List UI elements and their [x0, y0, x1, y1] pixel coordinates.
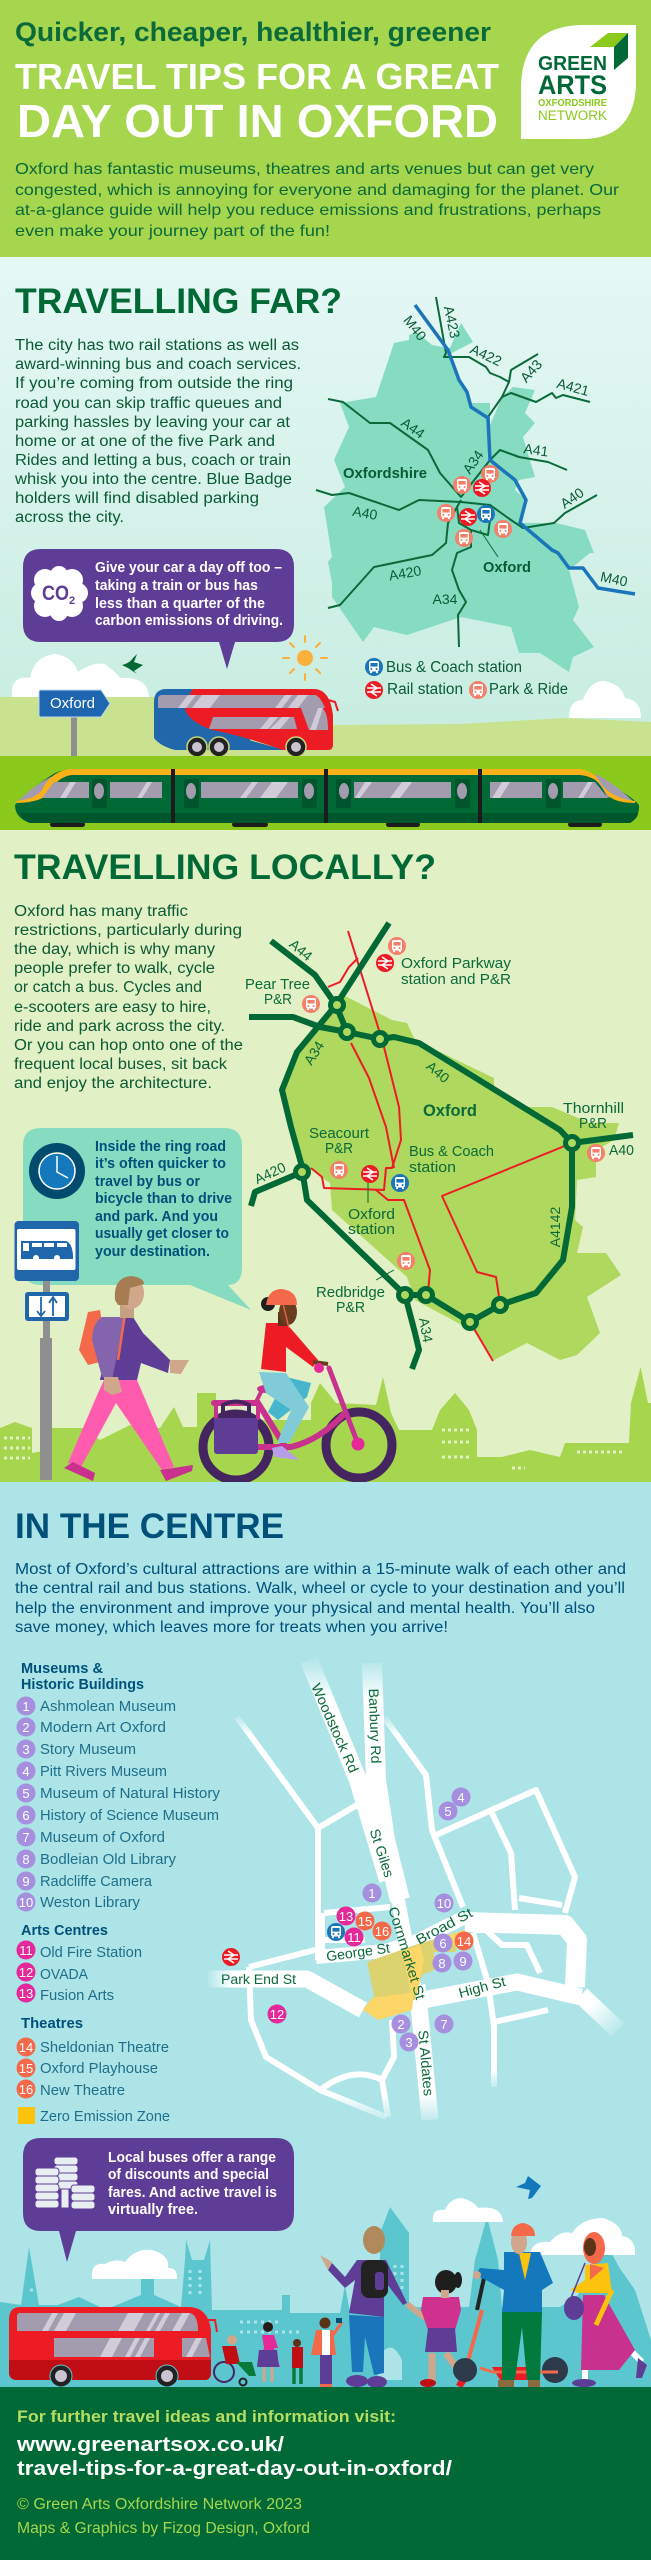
map labels: Seacourt	[309, 1125, 370, 1142]
body text: travelling far	[14, 337, 301, 526]
body text: travelling locally: Or you can hop onto one of the	[14, 1037, 243, 1054]
body text: travelling far: parking hassles by leaving your car at	[15, 414, 291, 431]
figure: person pointing	[320, 2226, 425, 2388]
main streets	[208, 1660, 618, 2120]
footer URL	[16, 2434, 453, 2480]
logo: Green Arts Oxfordshire Network: GREEN	[538, 52, 607, 75]
venue legend: Arts Centres	[21, 1923, 108, 1939]
panel: footer	[0, 2387, 651, 2560]
double decker bus	[154, 689, 338, 757]
callout: car day off	[23, 549, 294, 669]
street labels: St Giles	[367, 1827, 397, 1879]
panel: travelling locally	[0, 830, 651, 1482]
map labels: P&R	[579, 1115, 607, 1132]
map: Oxfordshire: Oxford	[483, 559, 531, 576]
map labels	[245, 936, 634, 1344]
credits	[17, 2496, 310, 2537]
intro text: Oxford has fantastic museums, theatres and arts venues but can get very	[15, 161, 594, 178]
callout text: usually get closer to	[95, 1226, 229, 1242]
map labels: station	[348, 1221, 395, 1238]
venue legend: Story Museum	[40, 1741, 136, 1758]
icon: sun	[283, 636, 327, 680]
body text: travelling far: road you can skip traffic queues and	[15, 395, 282, 412]
callout text: fares. And active travel is	[108, 2185, 277, 2201]
map labels: Pear Tree	[245, 976, 310, 993]
footer prompt: For further travel ideas and information visit:	[17, 2407, 396, 2426]
map: Oxfordshire: A423	[441, 304, 463, 340]
icon: bird	[122, 654, 143, 674]
callout text: travel by bus or	[95, 1174, 200, 1190]
street labels: Banbury Rd	[366, 1688, 384, 1764]
body text: travelling far: If you’re coming from outside the ring	[15, 375, 293, 392]
body text: travelling locally	[14, 903, 243, 1092]
intro text: even make your journey part of the fun!	[15, 223, 330, 240]
map legend: Rail station	[387, 681, 463, 698]
figure: man with scooter	[453, 2223, 568, 2387]
figure: girl	[420, 2270, 469, 2388]
map markers: 2	[397, 2017, 405, 2032]
venue legend: Historic Buildings	[21, 1677, 144, 1693]
street labels: Broad St	[413, 1904, 475, 1948]
street labels: Cornmarket St	[385, 1905, 429, 2001]
intro text: at-a-glance guide will help you reduce emissions and frustrations, perhaps	[15, 202, 601, 219]
panel: grass strip with train	[0, 756, 651, 830]
venue legend: Modern Art Oxford	[40, 1719, 166, 1736]
figure: walking man	[64, 1276, 193, 1481]
body text: travelling far: whisk you into the centre. Blue Badge	[14, 471, 292, 488]
callout text: virtually free.	[108, 2202, 198, 2218]
body text: in the centre	[15, 1561, 626, 1636]
map markers: 16	[375, 1924, 389, 1939]
callout text: and park. And you	[95, 1209, 218, 1225]
icon: CO2 cloud	[31, 566, 88, 621]
train	[15, 769, 639, 827]
footer URL: travel-tips-for-a-great-day-out-in-oxford/	[17, 2458, 453, 2480]
map: Oxfordshire: A34	[459, 447, 487, 477]
body text: travelling far: Rides and letting a bus, coach or train	[15, 452, 291, 469]
red bus	[9, 2307, 217, 2387]
venue legend: Zero Emission Zone	[40, 2108, 170, 2125]
map: Oxfordshire: M40	[599, 568, 629, 590]
strapline: Quicker, cheaper, healthier, greener	[15, 17, 492, 47]
road sign: Oxford: Oxford	[50, 695, 95, 712]
map: Oxfordshire: M40	[400, 312, 430, 344]
map labels: station	[409, 1159, 456, 1176]
callout text: it’s often quicker to	[95, 1156, 226, 1172]
body text: travelling far: across the city.	[15, 509, 124, 526]
venue legend: 16	[19, 2082, 33, 2097]
map labels: A44	[286, 936, 316, 964]
heading: in the centre: IN THE CENTRE	[15, 1507, 284, 1546]
street labels: George St	[325, 1940, 391, 1964]
venue legend: Ashmolean Museum	[40, 1698, 176, 1715]
map: Oxfordshire: A40	[351, 503, 379, 523]
body text: travelling locally: frequent local buses, sit back	[14, 1056, 227, 1073]
map labels: P&R	[336, 1299, 365, 1316]
intro text	[15, 161, 620, 240]
clouds	[12, 654, 641, 718]
icon: CO2 cloud: 2	[69, 595, 75, 607]
map labels: A40	[609, 1142, 634, 1159]
venue legend: Museum of Oxford	[40, 1829, 165, 1846]
venue legend: 11	[19, 1943, 33, 1958]
body text: in the centre: Most of Oxford’s cultural attractions are within a 15-minute walk of each other and	[15, 1561, 626, 1578]
figure: cyclist	[203, 1289, 392, 1480]
skyline: teal	[0, 2207, 651, 2387]
icon: CO2 cloud: CO	[42, 582, 69, 605]
venue legend: New Theatre	[40, 2082, 125, 2099]
title line 1: TRAVEL TIPS FOR A GREAT	[15, 56, 499, 97]
venue legend: Weston Library	[40, 1894, 140, 1911]
venue legend: Museum of Natural History	[40, 1785, 220, 1802]
body text: in the centre: save money, which leaves more for treats when you arrive!	[15, 1619, 448, 1636]
street labels: Woodstock Rd	[308, 1681, 362, 1775]
body text: travelling far: holders will find disabled parking	[15, 490, 259, 507]
street labels: High St	[457, 1973, 507, 2001]
thin streets	[237, 1717, 575, 2117]
venue legend: Old Fire Station	[40, 1944, 142, 1961]
map: Oxfordshire: A421	[555, 375, 591, 399]
callout text: carbon emissions of driving.	[95, 613, 283, 629]
roads	[249, 923, 633, 1369]
map markers: 1	[368, 1886, 376, 1901]
logo: Green Arts Oxfordshire Network: ARTS	[538, 70, 607, 100]
map labels: Oxford	[348, 1206, 395, 1223]
callout text: Give your car a day off too –	[95, 560, 282, 576]
map: Oxford ring road	[245, 923, 634, 1369]
body text: travelling locally: or catch a bus. Cycles and	[14, 979, 202, 996]
map legend: Bus & Coach station	[386, 659, 522, 676]
map markers: 9	[459, 1954, 467, 1969]
map legend	[365, 658, 568, 699]
callout text: Inside the ring road	[95, 1139, 226, 1155]
venue legend: Theatres	[21, 2016, 83, 2032]
map legend: Park & Ride	[489, 681, 568, 698]
map markers: 6	[439, 1936, 447, 1951]
title line 2: DAY OUT IN OXFORD	[17, 95, 498, 147]
callout text: taking a train or bus has	[95, 578, 258, 594]
callout text	[108, 2150, 277, 2218]
zero emission zone	[363, 1930, 465, 2020]
map icons	[302, 937, 605, 1270]
venue legend: Radcliffe Camera	[40, 1873, 153, 1890]
venue legend: 2	[22, 1720, 30, 1735]
map labels: Oxford	[423, 1101, 477, 1120]
callout: local buses	[23, 2138, 294, 2262]
map labels: Thornhill	[563, 1100, 624, 1117]
venue legend: Bodleian Old Library	[40, 1851, 176, 1868]
body text: travelling locally: Oxford has many traffic	[14, 903, 188, 920]
map labels: Redbridge	[316, 1284, 385, 1301]
map: Oxfordshire	[316, 297, 635, 672]
body text: travelling locally: e-scooters are easy to hire,	[14, 999, 211, 1016]
venue legend: 14	[19, 2040, 33, 2055]
map markers: 11	[347, 1930, 361, 1945]
callout text: bicycle than to drive	[95, 1191, 232, 1207]
panel: travelling far	[0, 257, 651, 757]
map labels: A420	[252, 1159, 288, 1187]
street labels: Park End St	[221, 1971, 296, 1987]
venue legend: 7	[22, 1830, 30, 1845]
venue legend: 8	[22, 1852, 30, 1867]
venue legend: 9	[22, 1874, 30, 1889]
venue legend: 10	[19, 1895, 33, 1910]
map markers	[222, 1788, 474, 2052]
panel: header	[0, 0, 651, 257]
skyline: green	[0, 1367, 651, 1482]
callout text: Local buses offer a range	[108, 2150, 276, 2166]
venue legend: Fusion Arts	[40, 1987, 114, 2004]
venue legend: Oxford Playhouse	[40, 2060, 158, 2077]
logo: Green Arts Oxfordshire Network: OXFORDSHIRE	[538, 97, 607, 109]
venue legend: 3	[22, 1742, 30, 1757]
venue legend: 6	[22, 1808, 30, 1823]
venue legend: Pitt Rivers Museum	[40, 1763, 167, 1780]
callout text	[95, 560, 283, 629]
map labels: station and P&R	[401, 971, 511, 988]
map markers: 15	[358, 1914, 372, 1929]
map markers: 7	[440, 2017, 448, 2032]
map: Oxfordshire: A43	[517, 356, 545, 386]
map: Oxfordshire: A34	[433, 591, 458, 607]
bus stop sign	[14, 1221, 79, 1480]
map labels: P&R	[264, 991, 292, 1008]
road sign: Oxford	[39, 690, 110, 757]
hills	[0, 697, 651, 757]
credits: Maps & Graphics by Fizog Design, Oxford	[17, 2520, 310, 2537]
map: Oxfordshire: A420	[387, 562, 423, 584]
map markers: 14	[457, 1934, 471, 1949]
panel: in the centre	[0, 1482, 651, 2388]
street map	[208, 1660, 618, 2120]
callout text: your destination.	[95, 1244, 210, 1260]
map labels: Oxford Parkway	[401, 955, 512, 972]
map markers: 3	[405, 2035, 413, 2050]
map: Oxfordshire: A41	[523, 440, 550, 460]
body text: travelling locally: ride and park across the city.	[14, 1018, 225, 1035]
venue legend: 1	[22, 1699, 30, 1714]
callout text: less than a quarter of the	[95, 596, 265, 612]
body text: travelling far: The city has two rail stations as well as	[15, 337, 299, 354]
map labels: P&R	[325, 1140, 353, 1157]
map markers: 4	[457, 1790, 465, 1805]
map: Oxfordshire: A44	[398, 414, 428, 442]
callout: ring road	[23, 1128, 251, 1310]
logo: Green Arts Oxfordshire Network	[521, 25, 636, 139]
venue legend: 13	[19, 1986, 33, 2001]
map markers: 8	[438, 1956, 446, 1971]
map labels: A34	[416, 1316, 436, 1344]
venue legend: 4	[22, 1764, 30, 1779]
map labels: A34	[301, 1038, 327, 1068]
body text: travelling locally: and enjoy the architecture.	[14, 1075, 212, 1092]
clouds and bird	[92, 2176, 635, 2279]
body text: travelling locally: the day, which is why many	[14, 941, 215, 958]
venue legend: Sheldonian Theatre	[40, 2039, 169, 2056]
credits: © Green Arts Oxfordshire Network 2023	[17, 2496, 302, 2513]
map: Oxfordshire: A422	[468, 341, 504, 369]
body text: travelling far: home or at one of the five Park and	[15, 433, 275, 450]
venue legend	[16, 1661, 220, 2125]
venue legend: 15	[19, 2061, 33, 2076]
icon: coins	[35, 2157, 95, 2209]
footer URL: www.greenartsox.co.uk/	[16, 2434, 285, 2456]
intro text: congested, which is annoying for everyone and damaging for the planet. Our	[15, 182, 620, 199]
body text: travelling locally: people prefer to walk, cycle	[14, 960, 215, 977]
logo: Green Arts Oxfordshire Network: NETWORK	[538, 108, 607, 123]
map markers: 5	[444, 1804, 452, 1819]
map labels: A4142	[547, 1207, 563, 1247]
group of small figures	[214, 2318, 342, 2387]
venue legend: 5	[22, 1786, 30, 1801]
venue legend: History of Science Museum	[40, 1807, 219, 1824]
map labels: A40	[423, 1058, 453, 1086]
callout text	[95, 1139, 232, 1260]
venue legend: 12	[19, 1965, 33, 1980]
map markers: 12	[270, 2007, 284, 2022]
street labels: St Aldates	[415, 2029, 437, 2097]
body text: in the centre: the central rail and bus stations. Walk, wheel or cycle to your destination and you’ll	[15, 1580, 625, 1597]
body text: travelling locally: restrictions, particularly during	[14, 922, 242, 939]
heading: travelling far: TRAVELLING FAR?	[15, 282, 342, 321]
map labels: Bus & Coach	[409, 1143, 494, 1160]
map: Oxfordshire: A40	[557, 484, 587, 512]
callout text: of discounts and special	[108, 2167, 269, 2183]
heading: travelling locally: TRAVELLING LOCALLY?	[14, 848, 436, 887]
map: Oxfordshire: Oxfordshire	[343, 465, 427, 482]
icon: clock	[29, 1143, 85, 1199]
figure: woman in hijab	[564, 2232, 647, 2387]
street labels	[221, 1681, 507, 2097]
venue legend: Museums &	[21, 1661, 104, 1677]
body text: travelling far: award-winning bus and coach services.	[15, 356, 301, 373]
map markers: 13	[339, 1909, 353, 1924]
rail lines	[311, 931, 572, 1361]
body text: in the centre: help the environment and improve your physical and mental health. You’ll also	[15, 1600, 595, 1617]
venue legend: OVADA	[40, 1966, 88, 1983]
map markers: 10	[437, 1896, 451, 1911]
